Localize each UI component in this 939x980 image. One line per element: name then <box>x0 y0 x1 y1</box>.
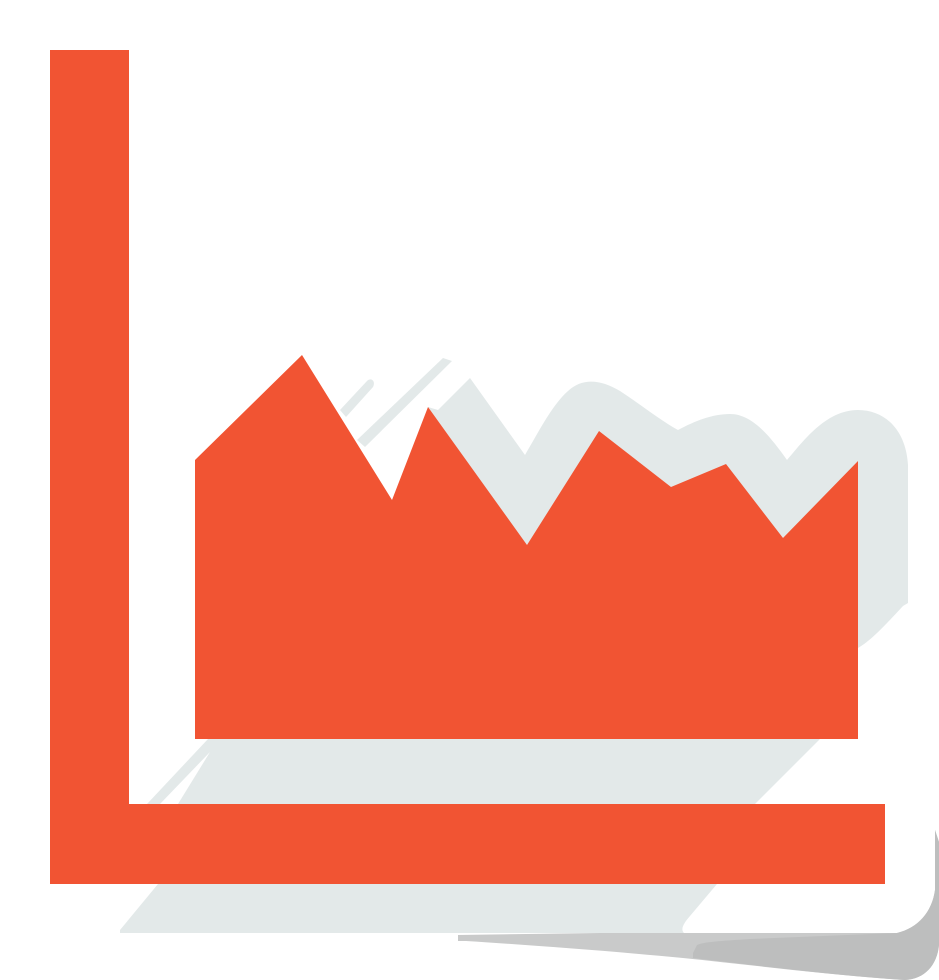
shadow: band below axis <box>120 884 717 933</box>
shadow: band between chart and axis with left streak <box>147 739 820 804</box>
area chart <box>195 355 858 739</box>
shadow: main cast shape <box>428 378 908 648</box>
shadow: upper short streak <box>340 379 374 417</box>
chart long shadow <box>120 358 908 933</box>
sticker drop shadow <box>458 830 939 980</box>
chart axes <box>50 50 885 884</box>
shadow: upper long streak <box>357 358 452 447</box>
